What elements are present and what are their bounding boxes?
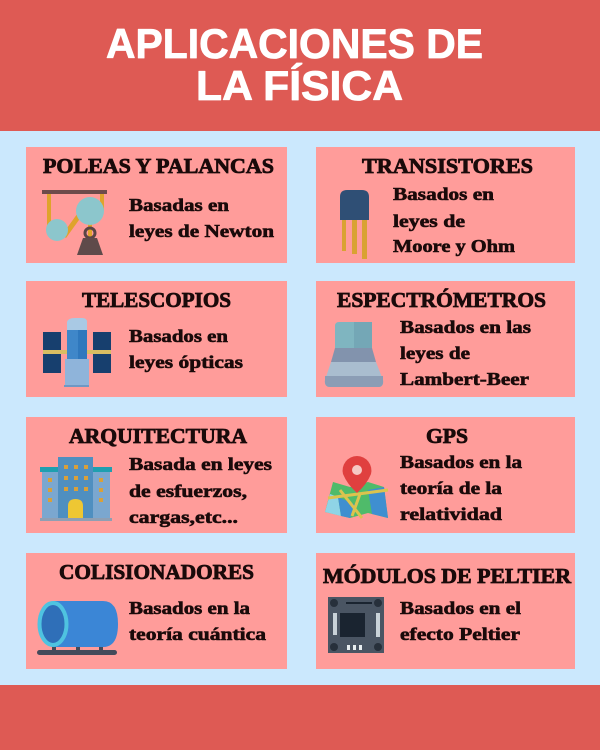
heading: espectrómetros: ESPECTRÓMETROS xyxy=(337,288,546,312)
text: transistores: Basados en xyxy=(393,184,494,204)
text: módulos de Peltier: efecto Peltier xyxy=(400,624,520,644)
panel: telescopios xyxy=(26,281,287,397)
panel: arquitectura xyxy=(26,417,287,533)
text: GPS xyxy=(400,452,522,524)
text: arquitectura xyxy=(129,454,272,527)
heading: módulos de Peltier: MÓDULOS DE PELTIER xyxy=(323,564,572,588)
text: poleas y palancas: Basadas en xyxy=(129,195,229,215)
icon: map with location pin xyxy=(325,456,388,518)
header band with title xyxy=(0,0,600,131)
text: transistores: leyes de xyxy=(393,211,465,231)
text: GPS: relatividad xyxy=(400,504,502,524)
text: módulos de Peltier: Basados en el xyxy=(400,598,521,618)
text: poleas y palancas: leyes de Newton xyxy=(129,221,274,241)
heading: arquitectura: ARQUITECTURA xyxy=(69,424,248,448)
text: transistores xyxy=(393,184,515,256)
icon: transistor xyxy=(340,190,369,259)
panel: espectrómetros xyxy=(316,281,575,397)
text: telescopios: Basados en xyxy=(129,326,228,346)
icon: building xyxy=(40,457,112,521)
icon: spectrometer xyxy=(325,322,383,387)
heading: transistores: TRANSISTORES xyxy=(362,154,533,178)
text: GPS: teoría de la xyxy=(400,478,502,498)
text: colisionadores xyxy=(129,598,266,644)
icon: Peltier chip xyxy=(328,597,384,653)
text: arquitectura: de esfuerzos, xyxy=(129,481,247,501)
footer band xyxy=(0,685,600,750)
text: colisionadores: Basados en la xyxy=(129,598,250,618)
text: espectrómetros: Lambert-Beer xyxy=(400,369,529,389)
heading: poleas y palancas: POLEAS Y PALANCAS xyxy=(43,154,274,178)
heading: colisionadores: COLISIONADORES xyxy=(59,560,254,584)
icon: pulleys and weight xyxy=(42,190,107,255)
heading: GPS: GPS xyxy=(426,424,468,448)
icon: collider tube xyxy=(37,601,118,655)
text: poleas y palancas xyxy=(129,195,274,241)
panel: transistores xyxy=(316,147,575,263)
title: APLICACIONES DE xyxy=(106,20,483,67)
title xyxy=(106,20,483,109)
text: arquitectura: Basada en leyes xyxy=(129,454,272,474)
text: transistores: Moore y Ohm xyxy=(393,236,515,256)
panel: GPS xyxy=(316,417,575,533)
panel: poleas y palancas xyxy=(26,147,287,263)
heading: telescopios: TELESCOPIOS xyxy=(82,288,231,312)
text: colisionadores: teoría cuántica xyxy=(129,624,266,644)
text: arquitectura: cargas,etc... xyxy=(129,507,238,527)
text: espectrómetros: Basados en las xyxy=(400,317,531,337)
text: módulos de Peltier xyxy=(400,598,521,644)
text: GPS: Basados en la xyxy=(400,452,522,472)
text: espectrómetros: leyes de xyxy=(400,343,470,363)
text: telescopios: leyes ópticas xyxy=(129,352,243,372)
panel: colisionadores xyxy=(26,553,287,669)
text: telescopios xyxy=(129,326,243,372)
text: espectrómetros xyxy=(400,317,531,389)
icon: space telescope xyxy=(43,318,111,387)
title: LA FÍSICA xyxy=(196,62,403,109)
panel: módulos de Peltier xyxy=(316,553,575,669)
